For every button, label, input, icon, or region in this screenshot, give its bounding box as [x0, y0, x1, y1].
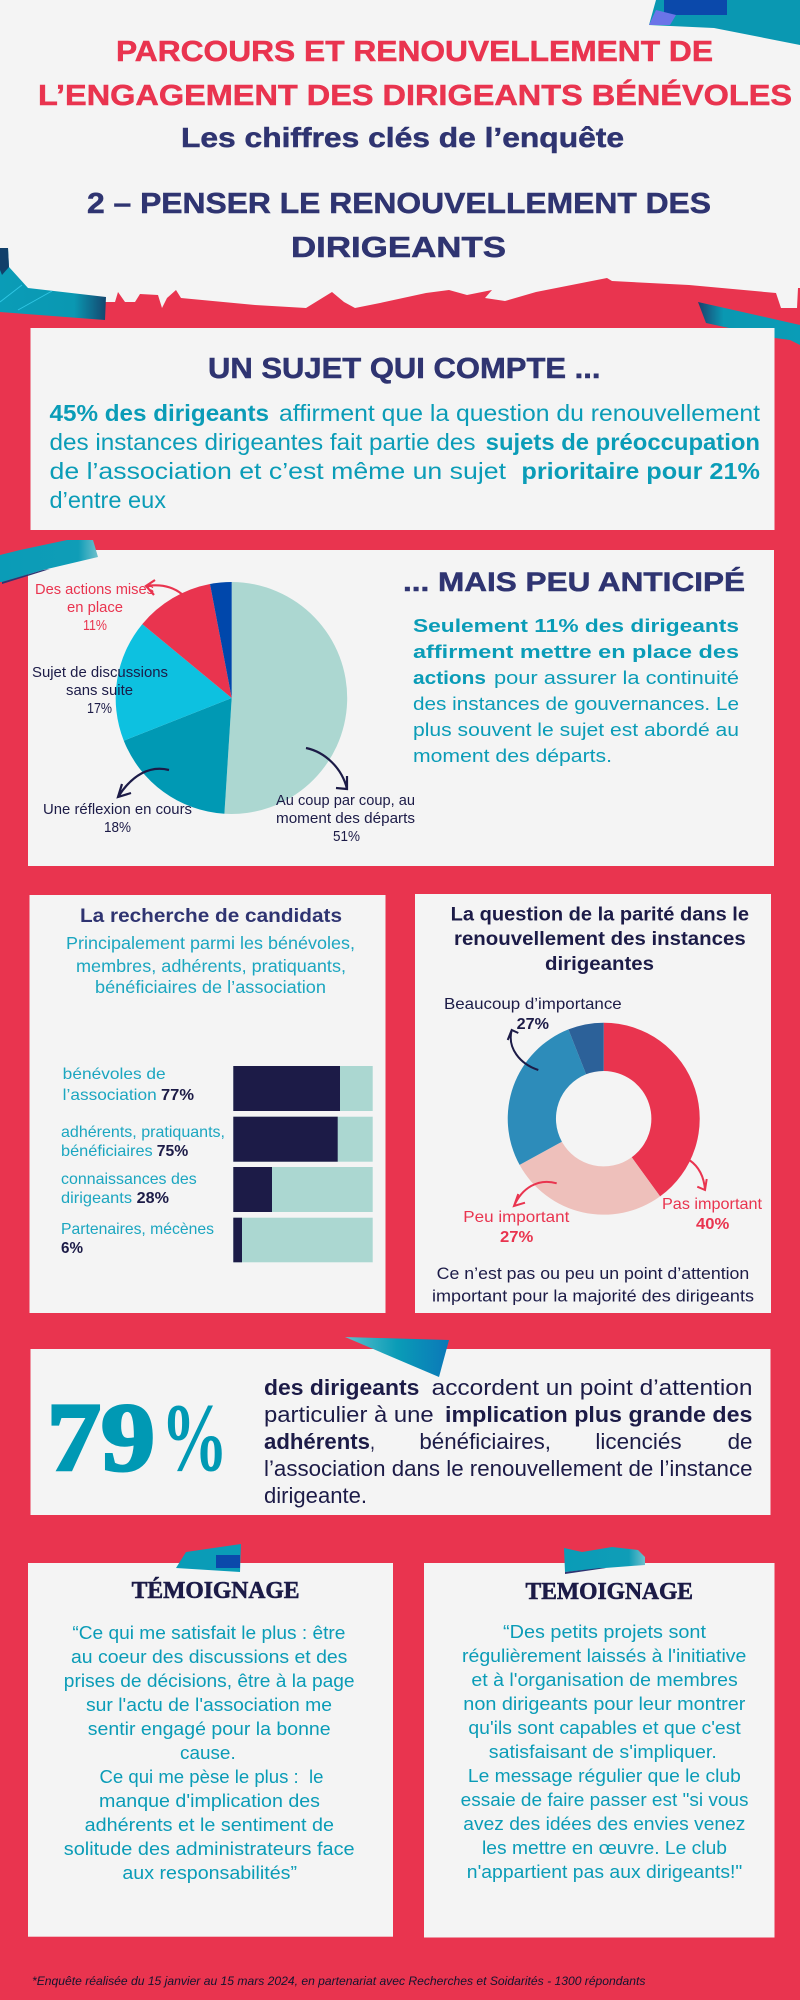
panel: témoignage 1 — [28, 1563, 393, 1937]
text block: Principalement parmi les bénévoles, — [66, 933, 355, 953]
quote: manque d'implication des — [99, 1790, 320, 1811]
text block: dirigeante. — [264, 1483, 367, 1508]
label: beaucoup d'importance: Beaucoup d’importance — [444, 996, 622, 1013]
text block — [66, 933, 355, 997]
text block: licenciés — [595, 1429, 682, 1454]
heading: La question de la parité dans le — [451, 905, 749, 926]
arrow: navy to beaucoup — [508, 1030, 538, 1070]
label: des actions mises en place — [35, 581, 154, 634]
bar: connaissances 28% — [61, 1167, 373, 1212]
arrow: red to actions — [146, 580, 182, 595]
arrow: red to peu important — [514, 1182, 557, 1206]
label: une réflexion en cours: Une réflexion en cours — [43, 801, 192, 818]
panel: mais peu anticipé — [28, 550, 774, 866]
quote: adhérents et le sentiment de — [85, 1814, 334, 1835]
heading — [451, 905, 749, 975]
arrow: navy to coup par coup — [306, 748, 347, 789]
icon: top right tape — [649, 0, 800, 45]
text block: affirment mettre en place des — [413, 642, 739, 662]
quote: cause. — [180, 1742, 236, 1763]
text block: d’entre eux — [50, 487, 166, 513]
bar: connaissances 28%: dirigeants — [61, 1190, 132, 1207]
heading: UN SUJET QUI COMPTE ... — [208, 353, 600, 385]
text block: actions — [413, 668, 486, 688]
title: L’ENGAGEMENT DES DIRIGEANTS BÉNÉVOLES — [38, 78, 792, 112]
text block: des dirigeants — [264, 1375, 419, 1400]
label: au coup par coup: moment des départs — [276, 810, 415, 827]
heading: ... MAIS PEU ANTICIPÉ — [403, 566, 745, 597]
quote — [461, 1621, 748, 1882]
text block: pour assurer la continuité — [494, 668, 739, 688]
bar: adhérents 75% — [61, 1117, 373, 1162]
label: sujet de discussions sans suite: 17% — [87, 700, 112, 717]
title — [38, 36, 792, 112]
text block: 45% des dirigeants — [50, 400, 269, 426]
text block: plus souvent le sujet est abordé au — [413, 720, 739, 740]
bar: connaissances 28%: 28% — [137, 1190, 169, 1207]
text block: Ce n’est pas ou peu un point d’attention — [437, 1265, 749, 1283]
text block: l’association dans le renouvellement de l’instance — [264, 1456, 752, 1481]
panel: un sujet qui compte — [30, 328, 774, 530]
bar: bénévoles 77% — [63, 1066, 373, 1111]
text block — [264, 1375, 752, 1508]
heading: TEMOIGNAGE — [526, 1579, 693, 1605]
bar: bénévoles 77%: bénévoles de — [63, 1066, 166, 1083]
icon: tape on card 1 — [176, 1544, 241, 1572]
heading: La recherche de candidats — [80, 906, 342, 927]
quote: n'appartient pas aux dirigeants!" — [467, 1861, 742, 1882]
icon: tape on 79% panel — [345, 1337, 449, 1377]
text block: des instances de gouvernances. Le — [413, 694, 739, 714]
text block: particulier à une — [264, 1402, 434, 1427]
quote: Le message régulier que le club — [468, 1765, 741, 1786]
icon: right tape — [698, 302, 800, 345]
quote: solitude des administrateurs face — [64, 1838, 355, 1859]
label: pas important: 40% — [696, 1216, 729, 1233]
quote — [64, 1622, 355, 1883]
panel: la recherche de candidats — [30, 895, 386, 1313]
text block: sujets de préoccupation — [486, 429, 760, 455]
panel: témoignage 2 — [424, 1563, 774, 1938]
bar: adhérents 75%: 75% — [157, 1143, 188, 1160]
label: beaucoup d'importance: 27% — [517, 1016, 549, 1033]
label: peu important: 27% — [500, 1229, 533, 1246]
section heading — [87, 188, 711, 264]
text block: de — [728, 1429, 752, 1454]
label: des actions mises en place: 11% — [83, 617, 107, 634]
quote: “Des petits projets sont — [503, 1621, 706, 1642]
header — [38, 36, 792, 264]
icon: tape on card 2 — [564, 1547, 645, 1574]
big number: % — [161, 1384, 228, 1491]
text block: bénéficiaires, — [419, 1429, 551, 1454]
text block: implication plus grande des — [445, 1402, 752, 1427]
quote: au coeur des discussions et des — [71, 1646, 347, 1667]
icon: tape on pie panel — [0, 540, 98, 584]
bar: partenaires 6%: Partenaires, mécènes — [61, 1221, 214, 1238]
quote: et à l'organisation de membres — [471, 1669, 738, 1690]
heading: renouvellement des instances — [454, 929, 746, 950]
section heading: 2 – PENSER LE RENOUVELLEMENT DES — [87, 188, 711, 220]
footnote: *Enquête réalisée du 15 janvier au 15 mars 2024, en partenariat avec Recherches et Soidarités - 1300 répondants — [32, 1974, 645, 1988]
quote: essaie de faire passer est "si vous — [461, 1789, 748, 1810]
panel: 79% — [30, 1349, 770, 1515]
text block: prioritaire pour 21% — [521, 458, 760, 484]
heading: TÉMOIGNAGE — [132, 1578, 300, 1604]
text block: adhérents — [264, 1429, 370, 1454]
text block — [413, 616, 739, 766]
label: peu important — [463, 1209, 570, 1246]
quote: satisfaisant de s'impliquer. — [489, 1741, 717, 1762]
label: des actions mises en place: en place — [67, 599, 123, 616]
text block — [50, 400, 761, 513]
text block: affirment que la question du renouvellement — [279, 400, 761, 426]
arrow: navy to réflexion — [118, 769, 169, 797]
bar: connaissances 28%: connaissances des — [61, 1171, 197, 1188]
quote: Ce qui me pèse le plus : le — [100, 1766, 324, 1787]
big number — [47, 1384, 228, 1491]
arrow: red to pas important — [689, 1160, 707, 1190]
bar: partenaires 6%: 6% — [61, 1240, 83, 1257]
text block: , — [370, 1429, 375, 1454]
text block: de l’association et c’est même un sujet — [50, 458, 507, 484]
title: PARCOURS ET RENOUVELLEMENT DE — [116, 36, 713, 68]
donut chart — [508, 1023, 700, 1215]
quote: “Ce qui me satisfait le plus : être — [72, 1622, 345, 1643]
label: des actions mises en place: Des actions mises — [35, 581, 154, 598]
label: sujet de discussions sans suite — [32, 664, 168, 717]
label: pas important — [662, 1196, 763, 1233]
icon: left tape — [0, 248, 106, 320]
quote: les mettre en œuvre. Le club — [482, 1837, 727, 1858]
text block: moment des départs. — [413, 746, 612, 766]
label: au coup par coup — [276, 792, 415, 845]
text block: important pour la majorité des dirigeants — [432, 1288, 754, 1306]
subtitle: Les chiffres clés de l’enquête — [181, 122, 624, 153]
big number: 79 — [47, 1384, 155, 1491]
bar: adhérents 75%: bénéficiaires — [61, 1143, 153, 1160]
quote: sur l'actu de l'association me — [86, 1694, 332, 1715]
bar: adhérents 75%: adhérents, pratiquants, — [61, 1124, 225, 1141]
label: une réflexion en cours: 18% — [104, 819, 131, 836]
quote: qu'ils sont capables et que c'est — [468, 1717, 741, 1738]
quote: avez des idées des envies venez — [463, 1813, 745, 1834]
label: une réflexion en cours — [43, 801, 192, 836]
section heading: DIRIGEANTS — [291, 232, 506, 264]
quote: non dirigeants pour leur montrer — [463, 1693, 745, 1714]
label: au coup par coup: 51% — [333, 828, 360, 845]
panel: la question de la parité — [415, 894, 771, 1313]
text block — [432, 1265, 754, 1306]
label: sujet de discussions sans suite: Sujet de discussions — [32, 664, 168, 681]
quote: sentir engagé pour la bonne — [88, 1718, 331, 1739]
label: sujet de discussions sans suite: sans suite — [66, 682, 133, 699]
text block: membres, adhérents, pratiquants, — [76, 956, 346, 976]
label: beaucoup d'importance — [444, 996, 622, 1033]
bar: bénévoles 77%: 77% — [161, 1087, 194, 1104]
quote: aux responsabilités” — [122, 1862, 297, 1883]
bar chart — [61, 1066, 373, 1262]
label: pas important: Pas important — [662, 1196, 763, 1213]
label: au coup par coup: Au coup par coup, au — [276, 792, 415, 809]
label: peu important: Peu important — [463, 1209, 570, 1226]
heading: dirigeantes — [545, 954, 654, 975]
bar: partenaires 6% — [61, 1218, 373, 1262]
bar: bénévoles 77%: l’association — [63, 1087, 157, 1104]
text block: bénéficiaires de l’association — [95, 977, 326, 997]
quote: régulièrement laissés à l'initiative — [462, 1645, 746, 1666]
text block: accordent un point d’attention — [432, 1375, 752, 1400]
pie chart — [116, 582, 347, 814]
text block: des instances dirigeantes fait partie des — [50, 429, 476, 455]
quote: prises de décisions, être à la page — [64, 1670, 355, 1691]
text block: Seulement 11% des dirigeants — [413, 616, 739, 636]
